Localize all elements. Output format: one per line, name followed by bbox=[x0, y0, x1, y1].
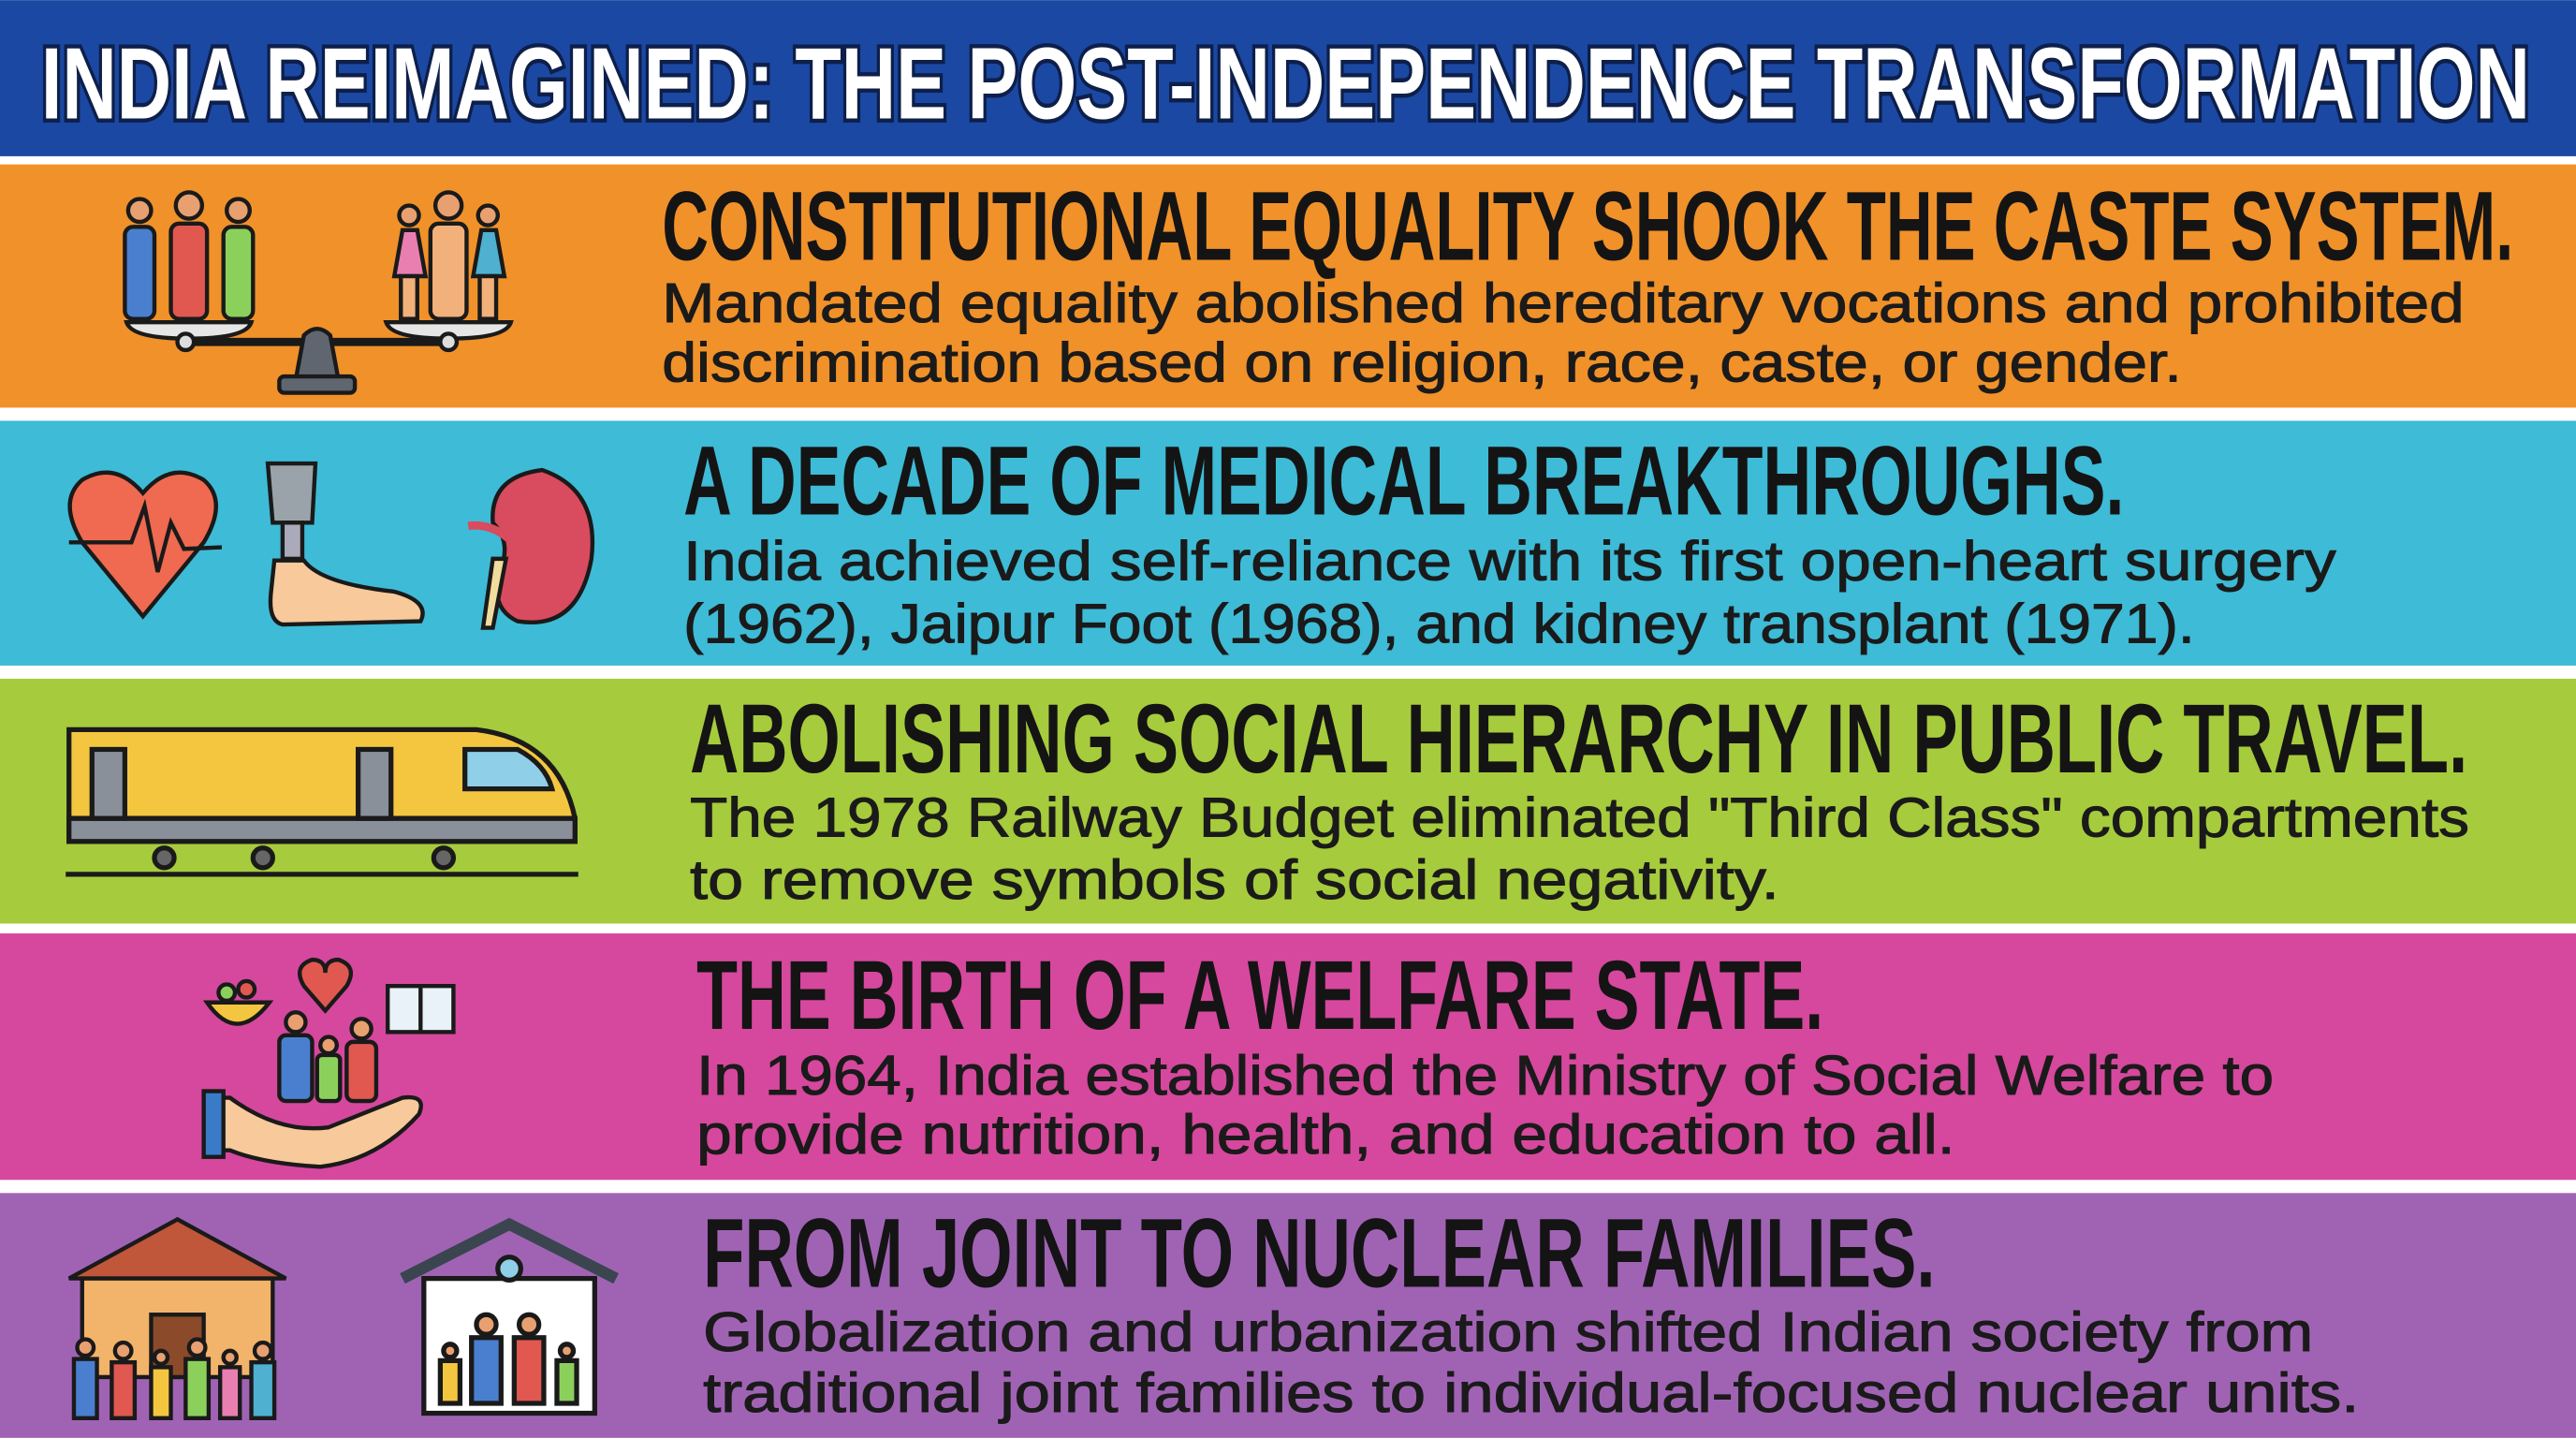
panel: nuclear families bbox=[0, 1193, 2576, 1438]
panel: medical breakthroughs: (1962), Jaipur Foot (1968), and kidney transplant (1971). bbox=[683, 592, 2195, 654]
icon: kidney bbox=[468, 470, 593, 628]
icon: heart bbox=[69, 473, 222, 616]
panel: constitutional equality bbox=[0, 165, 2576, 407]
heading: THE BIRTH OF A WELFARE STATE. bbox=[696, 941, 1823, 1050]
icon: joint family house bbox=[69, 1219, 285, 1418]
panel: welfare state: provide nutrition, health, and education to all. bbox=[696, 1103, 1955, 1166]
panel: welfare state bbox=[0, 933, 2576, 1180]
icon: nuclear family house bbox=[402, 1225, 616, 1414]
panel: public travel: to remove symbols of social negativity. bbox=[690, 848, 1779, 911]
panel: medical breakthroughs bbox=[0, 420, 2576, 666]
body text: The 1978 Railway Budget eliminated "Third Class" compartments bbox=[690, 785, 2469, 848]
body text: India achieved self-reliance with its first open-heart surgery bbox=[683, 530, 2336, 593]
icon: train bbox=[66, 729, 578, 874]
body text: Mandated equality abolished hereditary vocations and prohibited bbox=[662, 271, 2465, 334]
icon: hand with family bbox=[204, 960, 453, 1167]
body text: Globalization and urbanization shifted Indian society from bbox=[703, 1300, 2313, 1363]
heading: FROM JOINT TO NUCLEAR FAMILIES. bbox=[703, 1198, 1936, 1308]
panel: constitutional equality: discrimination based on religion, race, caste, or gender. bbox=[662, 330, 2182, 393]
body text: In 1964, India established the Ministry of Social Welfare to bbox=[696, 1044, 2274, 1107]
title band bbox=[0, 0, 2576, 156]
icon: scale with people bbox=[124, 192, 511, 393]
icon: prosthetic foot bbox=[268, 463, 423, 624]
panel: public travel bbox=[0, 679, 2576, 924]
panel: nuclear families: traditional joint families to individual-focused nuclear units. bbox=[703, 1361, 2359, 1424]
